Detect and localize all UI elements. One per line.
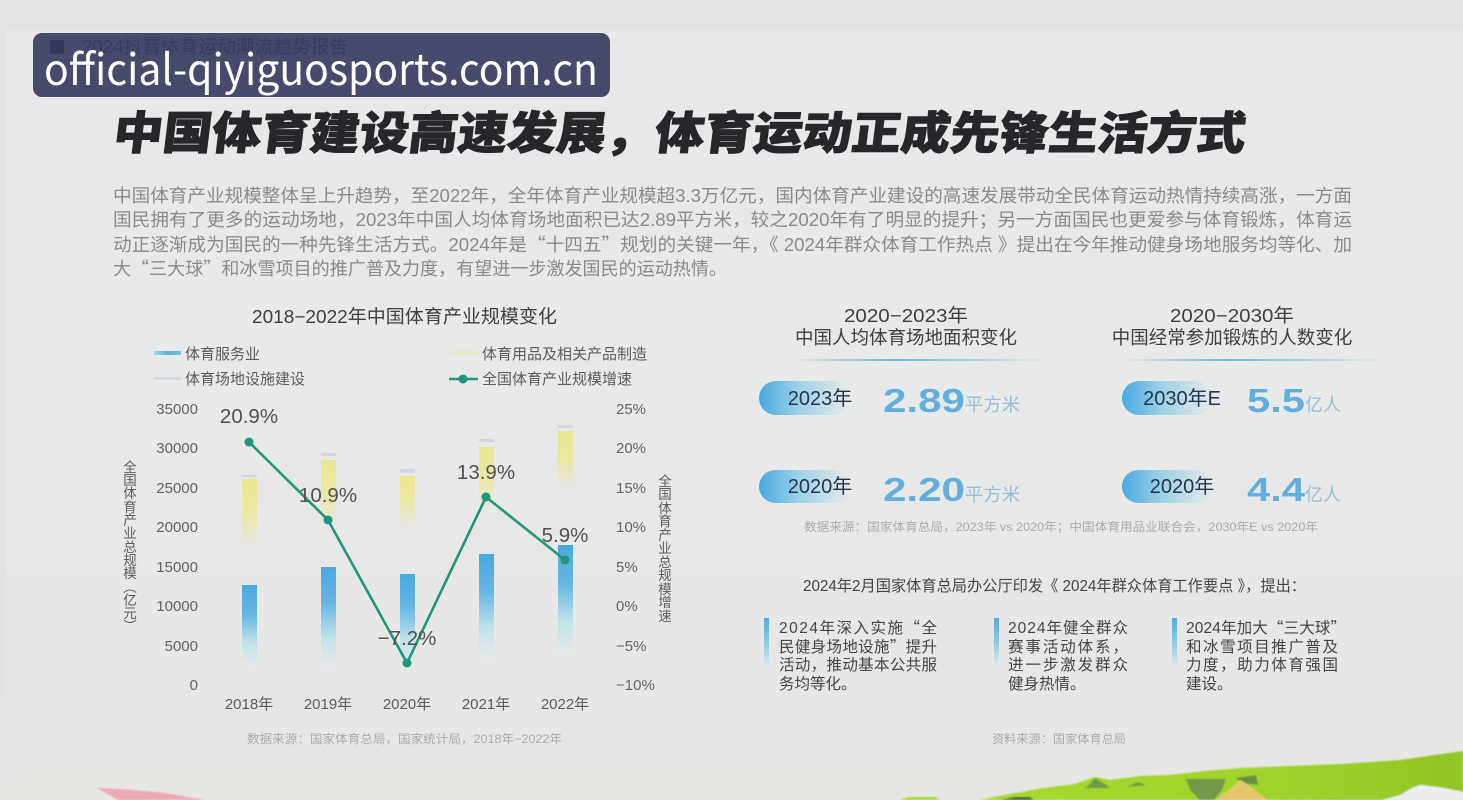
stat: 2023: 2023年 bbox=[788, 387, 852, 410]
illustration: pink flower bbox=[97, 788, 205, 800]
left axis: 20000 bbox=[156, 519, 198, 536]
policy item 2: 健身热情。 bbox=[1008, 675, 1086, 693]
stat: 2030E bbox=[1122, 381, 1341, 419]
stat: 2030E: 5.5 bbox=[1247, 382, 1305, 419]
left axis bbox=[156, 401, 198, 694]
stat: 2023 bbox=[759, 381, 1020, 419]
policy item 2: 2024年健全群众 bbox=[1008, 619, 1128, 637]
left axis: 35000 bbox=[156, 401, 198, 418]
stat: 2030E: 2030年E bbox=[1143, 387, 1221, 410]
stat: 2023: 2.89 bbox=[883, 382, 965, 419]
heading: 2020−2030年 bbox=[1170, 305, 1294, 326]
heading: 中国人均体育场地面积变化 bbox=[795, 327, 1017, 348]
growth line bbox=[244, 438, 570, 668]
stat: 2020: 亿人 bbox=[1305, 485, 1341, 505]
watermark banner: 2024抖音体育运动潮流趋势报告 bbox=[82, 37, 348, 57]
left axis: 10000 bbox=[156, 598, 198, 615]
left axis: 15000 bbox=[156, 559, 198, 576]
chart heading: 2018−2022年中国体育产业规模变化 bbox=[252, 306, 557, 327]
legend: 体育用品及相关产品制造 bbox=[482, 346, 647, 363]
policy item 1 bbox=[764, 616, 937, 693]
stat: 2023: 平方米 bbox=[965, 395, 1020, 415]
intro paragraph bbox=[113, 186, 1352, 281]
growth labels bbox=[220, 405, 588, 650]
right axis title: 业 bbox=[658, 541, 672, 556]
right axis: 25% bbox=[616, 401, 646, 418]
intro paragraph: 动正逐渐成为国民的一种先锋生活方式。2024年是 “十四五”规划的关键一年，《 2024年群众体育工作热点 》提出在今年推动健身场地服务均等化、加 bbox=[113, 231, 1352, 257]
stacked bars bbox=[242, 425, 573, 667]
heading bbox=[1112, 305, 1352, 348]
intro paragraph: 国民拥有了更多的运动场地，2023年中国人均体育场地面积已达2.89平方米，较之2020年有了明显的提升；另一方面国民也更爱参与体育锻炼，体育运 bbox=[113, 210, 1352, 230]
right axis title: 模 bbox=[658, 582, 672, 597]
stat: 2020 bbox=[1122, 470, 1341, 508]
left axis title: 元 bbox=[123, 606, 137, 621]
left axis title: 全 bbox=[123, 459, 137, 475]
x axis labels: 2019年 bbox=[304, 696, 352, 713]
intro paragraph: 中国体育产业规模整体呈上升趋势，至2022年，全年体育产业规模超3.3万亿元，国内体育产业建设的高速发展带动全民体育运动热情持续高涨，一方面 bbox=[113, 186, 1352, 206]
stat: 2020: 2020年 bbox=[1150, 475, 1214, 498]
policy source: 资料来源：国家体育总局 bbox=[992, 731, 1126, 746]
stats source: 数据来源：国家体育总局，2023年 vs 2020年；中国体育用品业联合会，2030年E vs 2020年 bbox=[804, 519, 1318, 534]
right axis: −5% bbox=[616, 638, 646, 655]
stat: 2020: 2.20 bbox=[883, 471, 965, 508]
policy item 3: 力度，助力体育强国 bbox=[1186, 656, 1338, 674]
stat: 2020 bbox=[759, 470, 1020, 508]
right axis bbox=[616, 401, 655, 694]
policy heading: 2024年2月国家体育总局办公厅印发《 2024年群众体育工作要点 》，提出： bbox=[803, 577, 1306, 595]
right axis title: 全 bbox=[658, 473, 672, 489]
policy item 3: 建设。 bbox=[1186, 675, 1233, 693]
left axis title: 业 bbox=[123, 526, 137, 541]
growth labels: 20.9% bbox=[220, 405, 278, 428]
legend bbox=[154, 346, 647, 388]
left axis title: 体 bbox=[123, 486, 137, 501]
x axis labels: 2022年 bbox=[541, 696, 589, 713]
growth labels: 10.9% bbox=[299, 484, 357, 507]
right axis title: 产 bbox=[658, 528, 672, 543]
policy item 2 bbox=[994, 618, 1128, 693]
right axis: 15% bbox=[616, 480, 646, 497]
legend: 全国体育产业规模增速 bbox=[482, 370, 632, 388]
right axis title: 增 bbox=[658, 595, 672, 610]
right axis title: 国 bbox=[658, 487, 672, 502]
left axis: 5000 bbox=[165, 638, 198, 655]
stat: 2020: 2020年 bbox=[788, 475, 852, 498]
left axis title: ︵ bbox=[123, 580, 137, 595]
left axis title: 国 bbox=[123, 473, 137, 488]
left axis title: ︶ bbox=[123, 619, 137, 634]
x axis labels: 2020年 bbox=[383, 696, 431, 713]
heading: 中国经常参加锻炼的人数变化 bbox=[1112, 327, 1352, 348]
left axis title: 规 bbox=[123, 553, 137, 568]
title: 中国体育建设高速发展，体育运动正成先锋生活方式 bbox=[110, 98, 1250, 163]
illustration: green hills and tent bbox=[900, 751, 1463, 800]
left axis: 30000 bbox=[156, 440, 198, 457]
policy item 3: 2024年加大“三大球” bbox=[1186, 616, 1346, 638]
left axis title: 亿 bbox=[123, 593, 137, 608]
left axis: 0 bbox=[190, 677, 198, 694]
right axis: 20% bbox=[616, 440, 646, 457]
heading bbox=[795, 305, 1017, 348]
legend: 体育服务业 bbox=[185, 346, 260, 363]
right axis: 0% bbox=[616, 598, 638, 615]
watermark banner: official-qiyiguosports.com.cn bbox=[44, 36, 598, 98]
chart panel: industry scale bbox=[123, 306, 672, 746]
intro paragraph: 大“三大球”和冰雪项目的推广普及力度，有望进一步激发国民的运动热情。 bbox=[113, 255, 727, 281]
x axis labels: 2018年 bbox=[225, 696, 273, 713]
right axis: −10% bbox=[616, 677, 655, 694]
right axis: 10% bbox=[616, 519, 646, 536]
left axis title: 模 bbox=[123, 566, 137, 581]
policy item 1: 务均等化。 bbox=[779, 675, 857, 693]
panel: sports venue area bbox=[759, 305, 1052, 508]
right axis title: 速 bbox=[658, 609, 672, 624]
right axis title: 体 bbox=[658, 501, 672, 516]
policy item 3 bbox=[1172, 616, 1346, 693]
left axis title: 育 bbox=[123, 500, 137, 515]
legend: 体育场地设施建设 bbox=[185, 371, 305, 388]
left axis title bbox=[123, 459, 137, 634]
stat: 2030E: 亿人 bbox=[1305, 395, 1341, 415]
x axis labels: 2021年 bbox=[462, 696, 510, 713]
growth labels: 5.9% bbox=[542, 524, 588, 547]
left axis: 25000 bbox=[156, 480, 198, 497]
right axis title: 总 bbox=[658, 555, 672, 570]
left axis title: 产 bbox=[123, 513, 137, 528]
left axis title: 总 bbox=[123, 540, 137, 555]
policy item 1: 2024年深入实施“全 bbox=[779, 616, 937, 638]
right axis title: 规 bbox=[658, 568, 672, 583]
right axis title bbox=[658, 473, 672, 624]
stat: 2020: 4.4 bbox=[1247, 471, 1306, 508]
panel: regular exercisers bbox=[1112, 305, 1388, 508]
policy item 1: 民健身场地设施”提升 bbox=[779, 635, 937, 657]
report header label: 2024抖音体育运动潮流趋势报告 bbox=[82, 37, 348, 57]
growth labels: 13.9% bbox=[457, 461, 515, 484]
growth labels: −7.2% bbox=[378, 627, 436, 650]
policy item 3: 和冰雪项目推广普及 bbox=[1186, 638, 1338, 656]
right axis: 5% bbox=[616, 559, 638, 576]
policy item 2: 赛事活动体系， bbox=[1008, 637, 1128, 656]
heading: 2020−2023年 bbox=[844, 305, 968, 326]
policy item 1: 活动，推动基本公共服 bbox=[779, 656, 937, 674]
chart source: 数据来源：国家体育总局，国家统计局，2018年−2022年 bbox=[247, 731, 562, 746]
x axis labels bbox=[225, 696, 589, 713]
policy item 2: 进一步激发群众 bbox=[1008, 656, 1128, 674]
stat: 2020: 平方米 bbox=[965, 485, 1020, 505]
right axis title: 育 bbox=[658, 514, 672, 529]
